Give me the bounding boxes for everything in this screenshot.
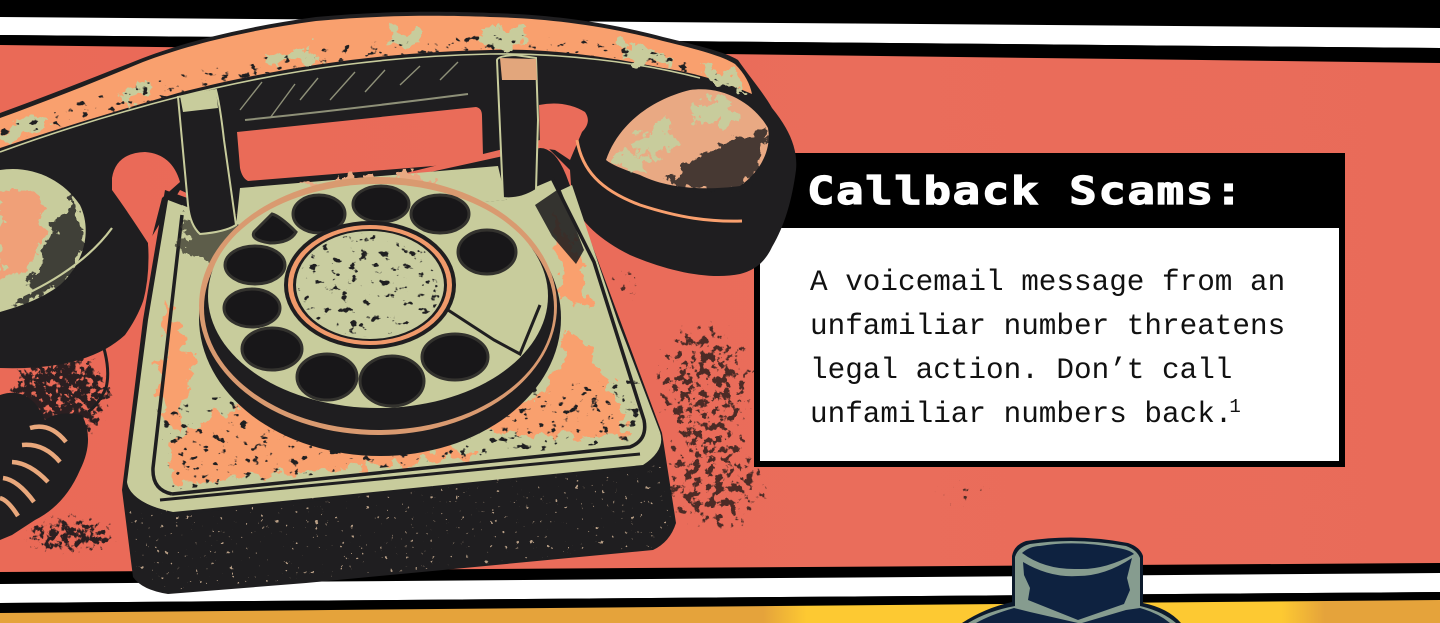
rotary dial <box>199 177 561 456</box>
dial shadow ring <box>199 180 561 456</box>
base dark body <box>122 148 676 594</box>
dial sage disc <box>208 184 548 408</box>
top lower black stripe <box>0 35 1440 63</box>
dense ink splatter behind the cord <box>5 345 130 555</box>
top face dark edges <box>153 178 645 494</box>
center plate wear <box>298 233 442 337</box>
right shoulder shadow <box>535 188 584 264</box>
handset dark body <box>0 12 796 368</box>
ink splatter on the coral panel <box>590 255 1015 574</box>
right cradle post <box>497 55 538 198</box>
panel: callback scams card <box>754 153 1345 467</box>
top face dark flecks <box>155 380 642 490</box>
center plate orange ring <box>288 225 452 345</box>
rim shadow stroke <box>160 454 640 500</box>
telephone base <box>122 55 676 594</box>
top face orange paint <box>160 210 630 484</box>
text block: scam description <box>810 266 1285 431</box>
left earpiece orange paint <box>0 190 45 280</box>
right earpiece sage wear <box>610 100 735 175</box>
center plate dark ring <box>293 229 447 341</box>
left cradle post <box>178 90 236 234</box>
handle dark flecks <box>0 35 752 148</box>
icon: fedora hat <box>962 537 1181 623</box>
right post cap <box>500 58 537 80</box>
right earpiece shading <box>665 130 767 191</box>
left earpiece rim <box>0 228 112 305</box>
center plate outer ring <box>284 221 456 349</box>
bottom lower black stripe <box>0 592 1440 613</box>
left hole <box>112 152 180 345</box>
body rim <box>127 185 661 512</box>
left earpiece shading <box>15 195 84 305</box>
right earpiece dome <box>606 89 769 188</box>
center plate <box>296 231 444 339</box>
strip below the window <box>236 166 506 226</box>
rim outer sage stroke <box>125 467 645 514</box>
top face <box>155 180 643 490</box>
handle sage wear <box>0 28 745 142</box>
text block: scam description: legal action. Don’t call <box>810 354 1232 387</box>
left post shadow <box>180 215 240 262</box>
bottom white stripe <box>0 573 1440 603</box>
text block: scam description: unfamiliar number threatens <box>810 310 1285 343</box>
left earpiece dome <box>0 169 86 312</box>
left post cap <box>180 90 218 112</box>
heading: callback scams: Callback Scams: <box>807 169 1244 213</box>
window opening <box>237 107 483 181</box>
cradle hatch marks <box>240 62 468 120</box>
telephone handset <box>0 12 796 368</box>
handle orange paint <box>0 16 752 148</box>
strip orange wear <box>300 172 440 205</box>
base front speckle <box>128 465 672 590</box>
bottom black stripe <box>0 563 1440 584</box>
top white stripe <box>0 17 1440 48</box>
card body <box>760 228 1339 461</box>
text block: scam description: unfamiliar numbers back.1 <box>810 396 1241 431</box>
handle lower edge line <box>0 54 700 152</box>
dial orange outer edge <box>199 177 557 435</box>
gold panel speckles <box>280 616 800 623</box>
dial dark channel <box>204 186 554 430</box>
finger stop outline <box>448 305 540 354</box>
icon: coiled phone cord <box>0 328 108 540</box>
right hole <box>539 104 588 160</box>
right earpiece rim <box>577 140 742 221</box>
gold panel <box>0 596 1440 623</box>
finger holes <box>224 186 516 406</box>
text block: scam description: A voicemail message from an <box>810 266 1285 299</box>
